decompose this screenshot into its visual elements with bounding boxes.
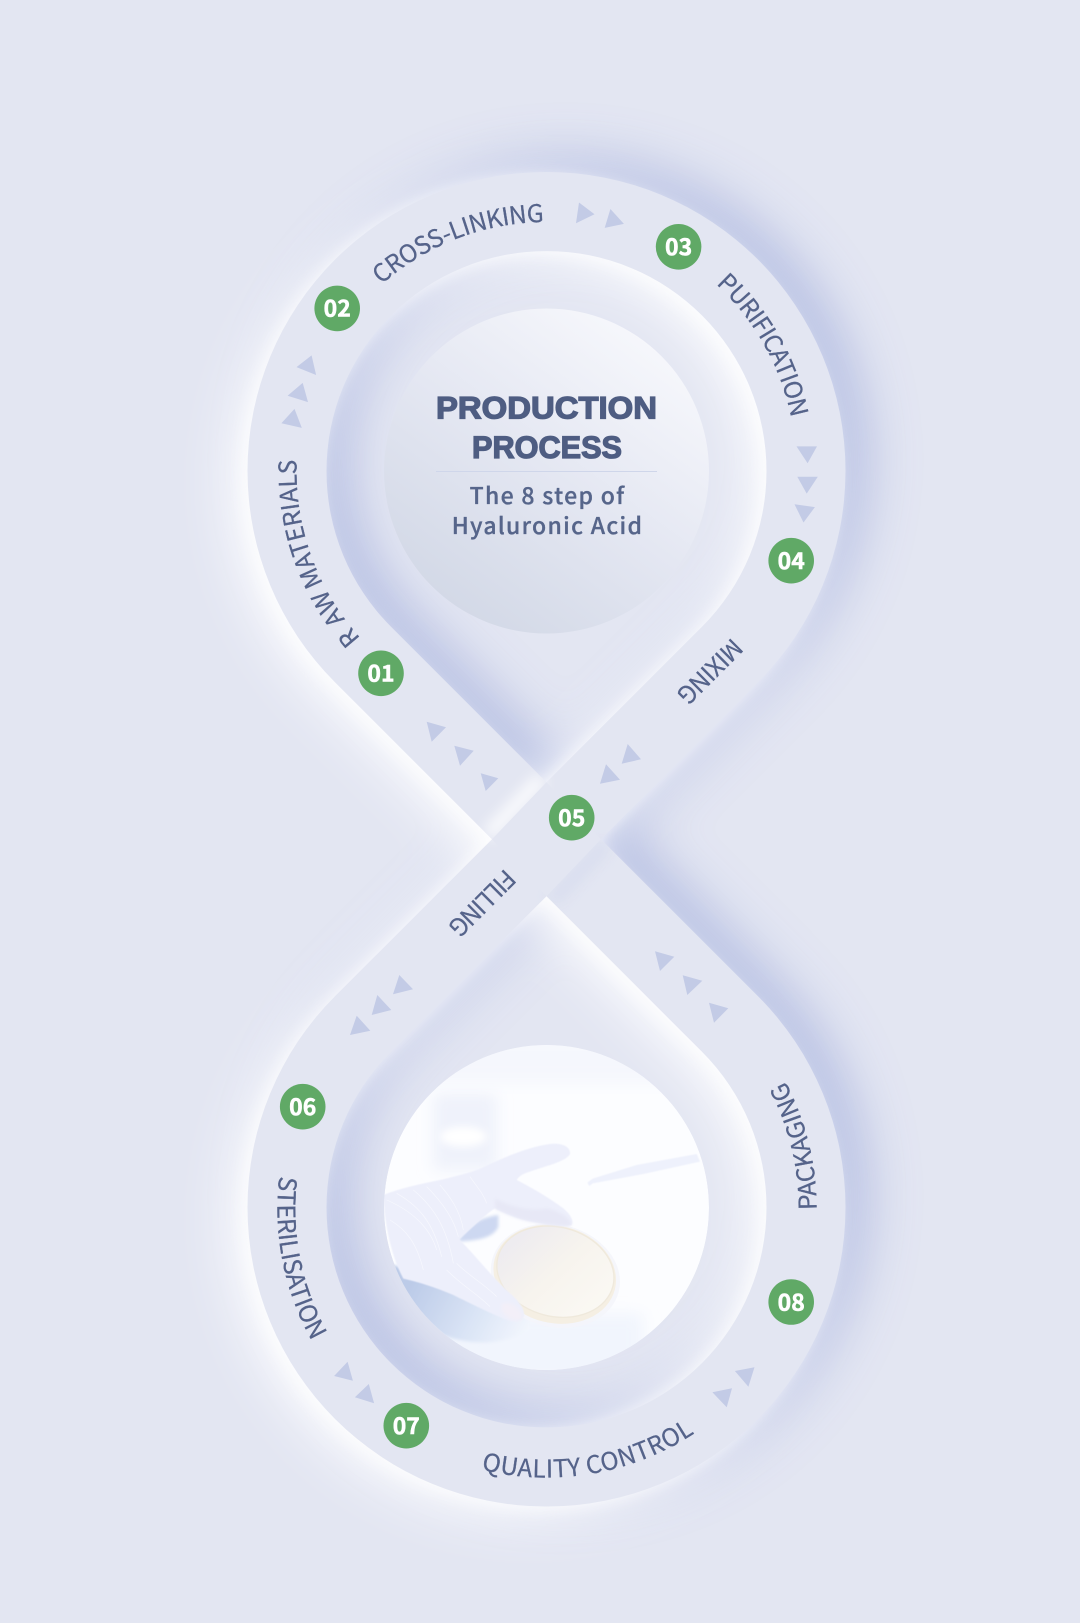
label: mixing: MIXING bbox=[670, 631, 751, 713]
arrows: step 01 to 02 bbox=[281, 355, 316, 428]
badge 08 bbox=[768, 1279, 814, 1325]
badge 08: 08 bbox=[778, 1283, 805, 1317]
track highlight bbox=[230, 183, 828, 1518]
arrows: step 02 to 03 bbox=[576, 202, 624, 228]
subtitle second line: Hyaluronic Acid bbox=[452, 507, 643, 541]
crossing over-strap bbox=[492, 782, 601, 896]
finger shading bbox=[495, 1198, 572, 1226]
arrows: step 01 toward crossing bbox=[427, 722, 498, 791]
direction arrows bbox=[281, 202, 818, 1407]
photo: gloved hand and petri dish bbox=[384, 1045, 709, 1370]
badge 04: 04 bbox=[778, 542, 805, 576]
label: quality control: QUALITY CONTROL bbox=[484, 1422, 694, 1478]
top disk bbox=[384, 308, 709, 634]
label: cross-linking: CROSS-LINKING bbox=[374, 204, 542, 281]
divider bbox=[436, 471, 657, 472]
title second line: PROCESS bbox=[472, 429, 622, 465]
figure-eight track bbox=[230, 161, 865, 1518]
arrows: step 04 to 05 bbox=[600, 744, 641, 784]
arrows: packaging bbox=[655, 951, 728, 1023]
pipette bbox=[587, 1154, 700, 1186]
badge 01: 01 bbox=[367, 655, 395, 689]
label: raw materials: RAW MATERIALS bbox=[278, 460, 360, 648]
label: packaging bbox=[771, 1083, 817, 1208]
beaker highlight bbox=[443, 1127, 484, 1146]
subtitle: The 8 step of bbox=[470, 477, 625, 511]
label: filling: FILLING bbox=[441, 862, 524, 945]
badge 07 bbox=[384, 1403, 429, 1448]
badge 02: 02 bbox=[324, 290, 351, 324]
crossing shading bbox=[486, 776, 544, 837]
upper background tint bbox=[370, 1040, 720, 1083]
badge 04 bbox=[768, 538, 814, 584]
label: packaging: PACKAGING bbox=[771, 1083, 817, 1208]
track surface bbox=[248, 172, 846, 1507]
table shadow bbox=[394, 1264, 510, 1342]
badge 06: 06 bbox=[289, 1088, 316, 1122]
table surface bbox=[452, 1318, 638, 1370]
step badges bbox=[280, 224, 814, 1448]
badge 07: 07 bbox=[393, 1407, 420, 1441]
badge 05: 05 bbox=[558, 799, 585, 833]
arrows: step 05 to 06 bbox=[350, 975, 413, 1035]
badge 05 bbox=[549, 795, 594, 840]
badge 03: 03 bbox=[665, 228, 692, 262]
petri dish bbox=[494, 1224, 616, 1324]
badge 01 bbox=[358, 650, 404, 696]
arrows: step 07 to 08 bbox=[712, 1367, 754, 1407]
beaker in background bbox=[436, 1096, 494, 1168]
arrows: step 06 to 07 bbox=[334, 1362, 374, 1403]
glove bbox=[383, 1144, 572, 1321]
shadow behind fingers bbox=[457, 1215, 498, 1242]
badge 06 bbox=[280, 1084, 326, 1129]
title: PRODUCTION bbox=[436, 390, 657, 426]
label: purification: PURIFICATION bbox=[718, 272, 808, 416]
track shadow bbox=[266, 161, 865, 1496]
label: sterilisation: STERILISATION bbox=[277, 1177, 327, 1339]
step labels bbox=[277, 204, 817, 1478]
badge 03 bbox=[656, 224, 701, 270]
badge 02 bbox=[314, 286, 360, 331]
fingertip tint bbox=[498, 1299, 525, 1324]
track highlight reinforcement bbox=[240, 176, 839, 1511]
title block bbox=[436, 390, 657, 541]
glove wrinkles bbox=[387, 1177, 497, 1307]
arrows: step 03 to 04 bbox=[794, 446, 818, 522]
